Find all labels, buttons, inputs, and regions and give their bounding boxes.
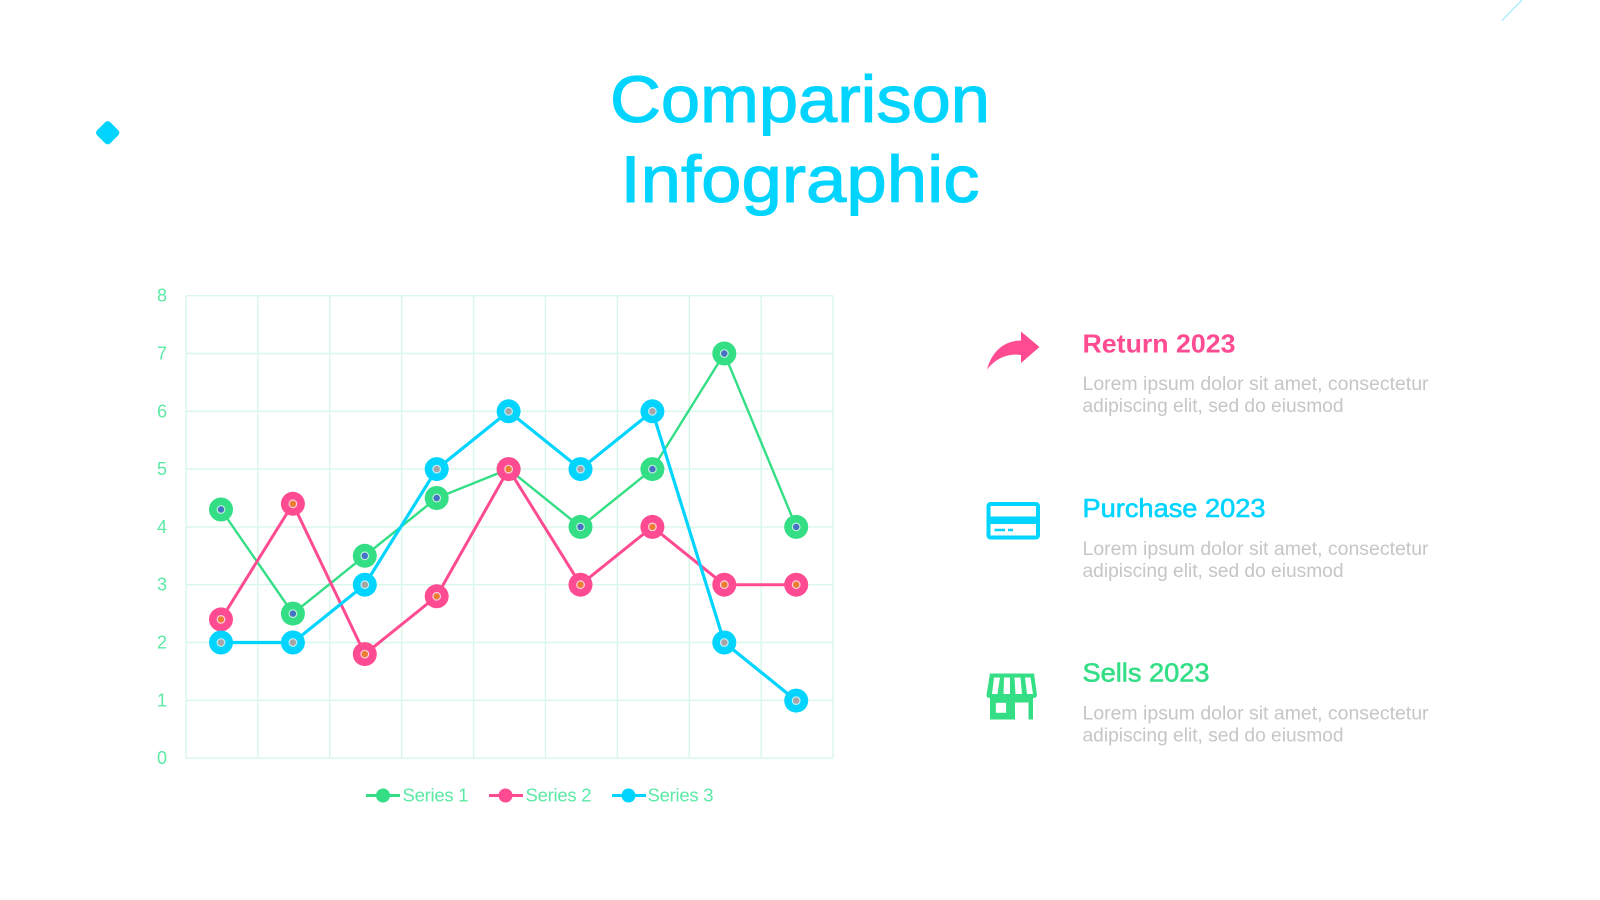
legend: Series 2 — [526, 784, 592, 806]
legend — [366, 784, 714, 806]
y axis labels: 8 — [157, 286, 167, 306]
y axis labels: 4 — [157, 517, 167, 537]
text: sells description: adipiscing elit, sed do eiusmod — [1082, 726, 1344, 746]
y axis labels: 0 — [157, 748, 167, 768]
icon: diamond bullet — [95, 120, 121, 146]
icon: curved arrow — [987, 332, 1040, 370]
legend: Series 3 — [648, 784, 714, 806]
legend: Series 1 — [402, 784, 468, 806]
y axis labels: 6 — [157, 401, 167, 421]
heading: sells 2023: Sells 2023 — [1082, 658, 1210, 688]
icon: credit card — [988, 504, 1038, 538]
icon: store — [986, 674, 1037, 720]
y axis labels: 5 — [157, 459, 167, 479]
heading: return 2023: Return 2023 — [1082, 329, 1236, 359]
series 2 line — [209, 457, 808, 666]
panel: return 2023 — [987, 329, 1429, 417]
panel: sells 2023 — [986, 658, 1429, 746]
text: purchase description — [1082, 539, 1429, 582]
text: return description — [1082, 374, 1429, 417]
panel: purchase 2023 — [988, 493, 1429, 582]
y axis labels: 7 — [157, 344, 167, 364]
text: purchase description: adipiscing elit, sed do eiusmod — [1082, 561, 1344, 582]
text: sells description — [1082, 704, 1429, 746]
text: return description: Lorem ipsum dolor sit amet, consectetur — [1082, 374, 1429, 395]
text: purchase description: Lorem ipsum dolor sit amet, consectetur — [1082, 539, 1429, 560]
y axis labels: 1 — [157, 690, 167, 710]
series 1 line — [209, 342, 808, 626]
series 3 line — [209, 399, 808, 713]
y axis labels: 3 — [157, 575, 167, 595]
title: Comparison — [610, 62, 990, 136]
line chart — [157, 286, 833, 806]
heading: purchase 2023: Purchase 2023 — [1082, 493, 1266, 523]
y axis labels — [157, 286, 167, 768]
text: return description: adipiscing elit, sed do eiusmod — [1082, 396, 1344, 417]
text: sells description: Lorem ipsum dolor sit amet, consectetur — [1082, 704, 1429, 724]
title: Infographic — [620, 142, 980, 216]
title — [610, 62, 990, 216]
y axis labels: 2 — [157, 632, 167, 652]
